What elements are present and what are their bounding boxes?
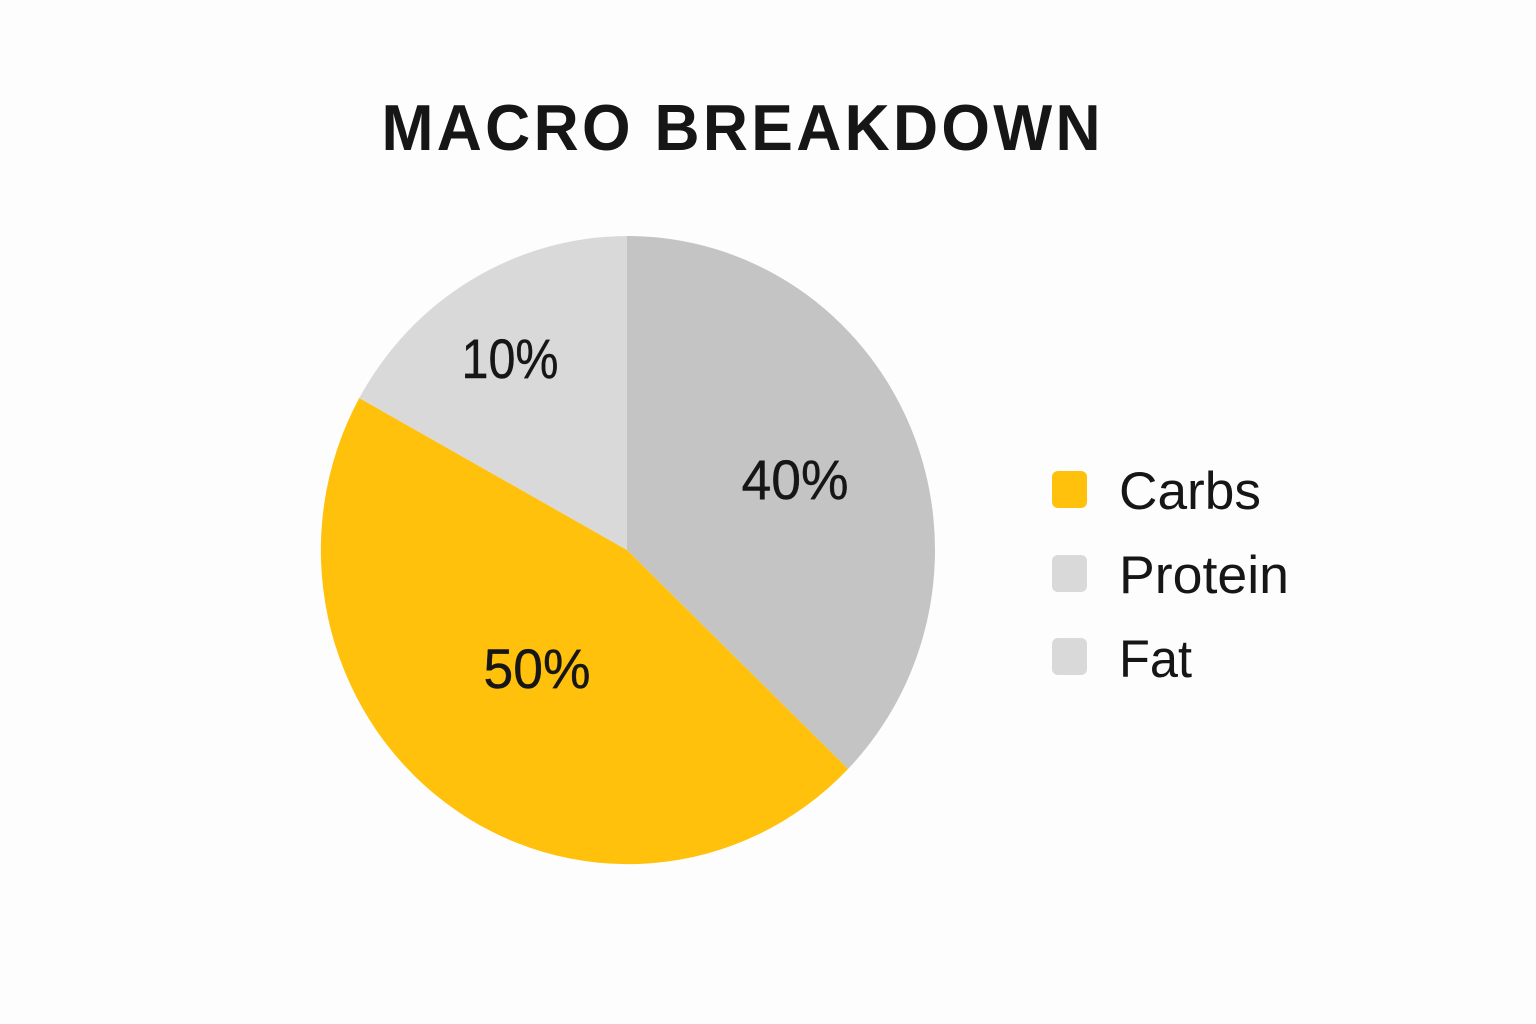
- legend label: protein: Protein: [1119, 546, 1289, 605]
- legend label: carbs: Carbs: [1119, 462, 1261, 521]
- title: MACRO BREAKDOWN: [381, 91, 1101, 164]
- pie chart: [321, 236, 935, 864]
- slice: carbs 50%: [321, 398, 848, 864]
- legend label: fat: Fat: [1119, 630, 1192, 689]
- slice: fat 10%: [359, 236, 627, 550]
- legend swatch: carbs: [1052, 471, 1087, 508]
- legend swatch: fat: [1052, 638, 1087, 675]
- legend: [1052, 462, 1289, 689]
- legend swatch: protein: [1052, 555, 1087, 592]
- label: 50%: 50%: [484, 637, 590, 700]
- slice: protein 40%: [627, 236, 935, 769]
- label: 10%: 10%: [462, 327, 558, 390]
- label: 40%: 40%: [742, 448, 848, 511]
